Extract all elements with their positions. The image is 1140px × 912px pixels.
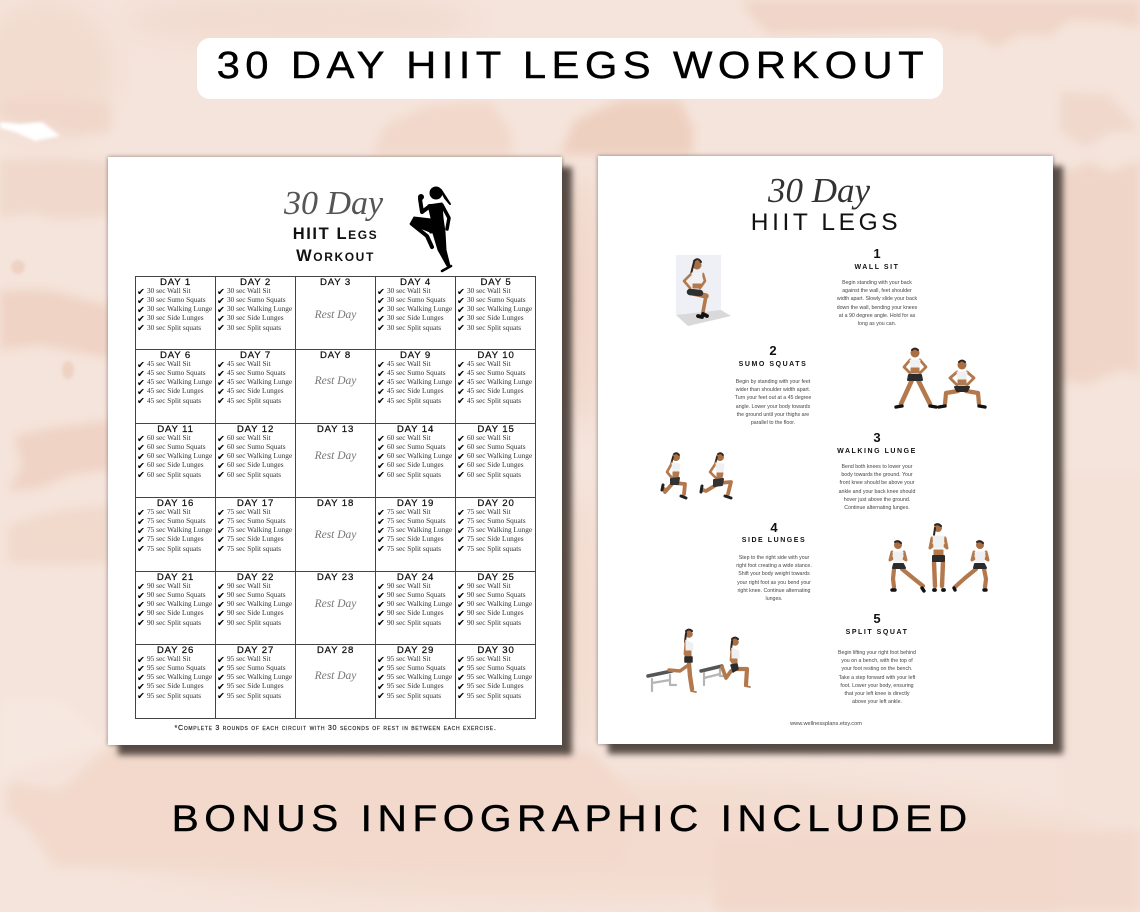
script heading: 30 Day: 30 Day bbox=[768, 171, 870, 210]
workout calendar table bbox=[135, 276, 536, 719]
day 22: 90 sec Sumo Squats bbox=[227, 590, 286, 599]
day 25: DAY 25 bbox=[477, 572, 515, 583]
day 29: 95 sec Sumo Squats bbox=[387, 663, 446, 672]
day 9: 45 sec Sumo Squats bbox=[387, 368, 446, 377]
exercise 5: split squat: 5 bbox=[873, 611, 881, 626]
day 26: 95 sec Walking Lunge bbox=[147, 672, 212, 681]
day 30: 95 sec Side Lunges bbox=[467, 681, 524, 690]
exercise 1: wall sit: at a 90 degree angle. Hold for as bbox=[839, 313, 915, 319]
exercise 2: sumo squats: 2 bbox=[769, 343, 777, 358]
day 14: 60 sec Side Lunges bbox=[387, 460, 444, 469]
exercise 4: side lunges bbox=[736, 520, 812, 602]
day 8: Rest Day bbox=[315, 375, 356, 387]
website footer: www.wellnessplans.etsy.com bbox=[790, 721, 862, 727]
exercise 3: walking lunge: body towards the ground. Your bbox=[841, 472, 913, 478]
day 6: 45 sec Sumo Squats bbox=[147, 368, 206, 377]
day 29: 95 sec Split squats bbox=[387, 691, 441, 700]
day 11: 60 sec Wall Sit bbox=[147, 433, 191, 442]
exercise 1: wall sit: Begin standing with your back bbox=[842, 280, 912, 286]
day 27: DAY 27 bbox=[237, 645, 274, 656]
day 1: 30 sec Walking Lunge bbox=[147, 304, 212, 313]
exercise 2: sumo squats: Turn your feet out at a 45 degree bbox=[735, 395, 811, 401]
day 21 bbox=[136, 572, 216, 645]
day 25: 90 sec Side Lunges bbox=[467, 608, 524, 617]
exercise 4: side lunges: SIDE LUNGES bbox=[742, 537, 806, 544]
day 16: 75 sec Sumo Squats bbox=[147, 516, 206, 525]
day 13: Rest Day bbox=[315, 450, 356, 462]
day 16: 75 sec Wall Sit bbox=[147, 507, 191, 516]
day 23 bbox=[296, 572, 376, 645]
day 11 bbox=[136, 424, 216, 498]
day 29: 95 sec Side Lunges bbox=[387, 681, 444, 690]
day 14: 60 sec Sumo Squats bbox=[387, 442, 446, 451]
day 3: DAY 3 bbox=[320, 277, 351, 288]
day 14: 60 sec Wall Sit bbox=[387, 433, 431, 442]
day 25: 90 sec Wall Sit bbox=[467, 581, 511, 590]
day 27: 95 sec Side Lunges bbox=[227, 681, 284, 690]
heading: HIIT Legs Workout: Workout bbox=[296, 247, 375, 265]
panel: 30 day calendar page bbox=[108, 157, 562, 745]
day 17: 75 sec Wall Sit bbox=[227, 507, 271, 516]
day 26: 95 sec Split squats bbox=[147, 691, 201, 700]
day 20: DAY 20 bbox=[477, 498, 515, 509]
day 22: 90 sec Side Lunges bbox=[227, 608, 284, 617]
day 7 bbox=[216, 350, 296, 424]
day 8 bbox=[296, 350, 376, 424]
day 10: 45 sec Side Lunges bbox=[467, 386, 524, 395]
heading: HIIT Legs Workout bbox=[293, 225, 378, 265]
day 15: 60 sec Split squats bbox=[467, 470, 521, 479]
heading: HIIT LEGS: HIIT LEGS bbox=[751, 209, 901, 236]
day 25: 90 sec Sumo Squats bbox=[467, 590, 526, 599]
day 19: 75 sec Wall Sit bbox=[387, 507, 431, 516]
day 15: DAY 15 bbox=[477, 424, 515, 435]
panel: HIIT legs exercise infographic page bbox=[598, 156, 1053, 744]
day 1: 30 sec Side Lunges bbox=[147, 313, 204, 322]
day 4: 30 sec Split squats bbox=[387, 323, 441, 332]
day 21: 90 sec Split squats bbox=[147, 618, 201, 627]
day 27: 95 sec Walking Lunge bbox=[227, 672, 292, 681]
day 4 bbox=[376, 277, 456, 350]
day 26: 95 sec Wall Sit bbox=[147, 654, 191, 663]
day 16: 75 sec Walking Lunge bbox=[147, 525, 212, 534]
white paper showing through bbox=[0, 122, 60, 141]
exercise 3: walking lunge: WALKING LUNGE bbox=[837, 448, 917, 455]
exercise 4: side lunges: Shift your body weight towards bbox=[738, 571, 810, 577]
day 21: 90 sec Wall Sit bbox=[147, 581, 191, 590]
exercise 5: split squat: SPLIT SQUAT bbox=[846, 629, 908, 636]
day 1: DAY 1 bbox=[160, 277, 191, 288]
day 3 bbox=[296, 277, 376, 350]
day 9: 45 sec Wall Sit bbox=[387, 359, 431, 368]
day 25: 90 sec Walking Lunge bbox=[467, 599, 532, 608]
exercise 2: sumo squats: parallel to the floor. bbox=[751, 420, 795, 426]
day 24: 90 sec Side Lunges bbox=[387, 608, 444, 617]
day 11: 60 sec Sumo Squats bbox=[147, 442, 206, 451]
day 25: 90 sec Split squats bbox=[467, 618, 521, 627]
day 11: 60 sec Split squats bbox=[147, 470, 201, 479]
day 14: 60 sec Walking Lunge bbox=[387, 451, 452, 460]
illustration: side lunges bbox=[890, 524, 988, 591]
day 4: 30 sec Wall Sit bbox=[387, 286, 431, 295]
day 1: 30 sec Split squats bbox=[147, 323, 201, 332]
day 14 bbox=[376, 424, 456, 498]
day 5: DAY 5 bbox=[480, 277, 512, 288]
day 19: 75 sec Side Lunges bbox=[387, 534, 444, 543]
illustration: wall sit bbox=[676, 255, 731, 326]
day 10: 45 sec Walking Lunge bbox=[467, 377, 532, 386]
day 9: 45 sec Walking Lunge bbox=[387, 377, 452, 386]
day 9: 45 sec Split squats bbox=[387, 396, 441, 405]
exercise 3: walking lunge: hover just above the ground. bbox=[844, 497, 910, 503]
day 15: 60 sec Wall Sit bbox=[467, 433, 511, 442]
exercise 4: side lunges: your right foot as you bend your bbox=[737, 580, 811, 586]
day 29: DAY 29 bbox=[397, 645, 434, 656]
day 6: DAY 6 bbox=[160, 350, 191, 361]
day 5 bbox=[456, 277, 536, 350]
exercise 1: wall sit: long as you can. bbox=[858, 321, 896, 327]
footnote: *Complete 3 rounds of each circuit with 30 seconds of rest in between each exercise. bbox=[174, 723, 497, 732]
day 11: DAY 11 bbox=[157, 424, 194, 435]
day 27: 95 sec Sumo Squats bbox=[227, 663, 286, 672]
day 21: 90 sec Side Lunges bbox=[147, 608, 204, 617]
day 1: 30 sec Wall Sit bbox=[147, 286, 191, 295]
exercise 3: walking lunge: 3 bbox=[873, 430, 881, 445]
day 24: 90 sec Sumo Squats bbox=[387, 590, 446, 599]
day 10 bbox=[456, 350, 536, 424]
day 22 bbox=[216, 572, 296, 645]
day 30: 95 sec Split squats bbox=[467, 691, 521, 700]
exercise 3: walking lunge: front knee should be above your bbox=[839, 480, 914, 486]
day 20: 75 sec Side Lunges bbox=[467, 534, 524, 543]
day 30: 95 sec Wall Sit bbox=[467, 654, 511, 663]
day 18: Rest Day bbox=[315, 529, 356, 541]
illustration: walking lunge bbox=[662, 453, 731, 498]
day 10: 45 sec Sumo Squats bbox=[467, 368, 526, 377]
day 7: 45 sec Walking Lunge bbox=[227, 377, 292, 386]
exercise 5: split squat: Begin lifting your right foot behind bbox=[838, 650, 916, 656]
day 17: 75 sec Side Lunges bbox=[227, 534, 284, 543]
day 20: 75 sec Split squats bbox=[467, 544, 521, 553]
day 23: DAY 23 bbox=[317, 572, 354, 583]
day 22: 90 sec Wall Sit bbox=[227, 581, 271, 590]
day 11: 60 sec Walking Lunge bbox=[147, 451, 212, 460]
day 2 bbox=[216, 277, 296, 350]
illustration: sumo squats bbox=[896, 348, 985, 407]
day 7: 45 sec Side Lunges bbox=[227, 386, 284, 395]
day 10: 45 sec Wall Sit bbox=[467, 359, 511, 368]
exercise 1: wall sit bbox=[836, 246, 918, 327]
day 9 bbox=[376, 350, 456, 424]
day 5: 30 sec Side Lunges bbox=[467, 313, 524, 322]
day 6: 45 sec Split squats bbox=[147, 396, 201, 405]
day 19: 75 sec Sumo Squats bbox=[387, 516, 446, 525]
day 19: DAY 19 bbox=[397, 498, 434, 509]
day 12: 60 sec Sumo Squats bbox=[227, 442, 286, 451]
day 12: 60 sec Wall Sit bbox=[227, 433, 271, 442]
exercise 5: split squat: foot. Lower your body, ensuring bbox=[840, 683, 914, 689]
day 17: 75 sec Walking Lunge bbox=[227, 525, 292, 534]
day 5: 30 sec Split squats bbox=[467, 323, 521, 332]
day 29: 95 sec Walking Lunge bbox=[387, 672, 452, 681]
day 1 bbox=[136, 277, 216, 350]
day 18 bbox=[296, 498, 376, 572]
day 17 bbox=[216, 498, 296, 572]
day 12: DAY 12 bbox=[237, 424, 274, 435]
exercise 5: split squat: you on a bench, with the top of bbox=[841, 658, 913, 664]
day 5: 30 sec Walking Lunge bbox=[467, 304, 532, 313]
exercise 3: walking lunge: Continue alternating lunges. bbox=[844, 505, 910, 511]
day 28: DAY 28 bbox=[317, 645, 354, 656]
day 17: DAY 17 bbox=[237, 498, 274, 509]
day 6: 45 sec Wall Sit bbox=[147, 359, 191, 368]
exercise 4: side lunges: right foot creating a wide stance. bbox=[736, 563, 812, 569]
day 9: DAY 9 bbox=[400, 350, 431, 361]
day 22: 90 sec Split squats bbox=[227, 618, 281, 627]
day 30: 95 sec Sumo Squats bbox=[467, 663, 526, 672]
day 20: 75 sec Sumo Squats bbox=[467, 516, 526, 525]
day 28: Rest Day bbox=[315, 670, 356, 682]
day 12: 60 sec Walking Lunge bbox=[227, 451, 292, 460]
day 17: 75 sec Split squats bbox=[227, 544, 281, 553]
day 2: DAY 2 bbox=[240, 277, 271, 288]
day 3: Rest Day bbox=[315, 309, 356, 321]
day 30: 95 sec Walking Lunge bbox=[467, 672, 532, 681]
day 9: 45 sec Side Lunges bbox=[387, 386, 444, 395]
day 29 bbox=[376, 645, 456, 718]
day 16: DAY 16 bbox=[157, 498, 194, 509]
exercise illustrations bbox=[646, 255, 990, 693]
day 2: 30 sec Split squats bbox=[227, 323, 281, 332]
day 8: DAY 8 bbox=[320, 350, 351, 361]
exercise 4: side lunges: lunges. bbox=[766, 596, 782, 602]
exercise 2: sumo squats: Begin by standing with your feet bbox=[736, 379, 810, 385]
day 22: 90 sec Walking Lunge bbox=[227, 599, 292, 608]
day 7: 45 sec Wall Sit bbox=[227, 359, 271, 368]
day 27: 95 sec Wall Sit bbox=[227, 654, 271, 663]
day 17: 75 sec Sumo Squats bbox=[227, 516, 286, 525]
day 20: 75 sec Wall Sit bbox=[467, 507, 511, 516]
day 4: DAY 4 bbox=[400, 277, 431, 288]
day 6 bbox=[136, 350, 216, 424]
exercise 1: wall sit: WALL SIT bbox=[855, 264, 899, 271]
day 2: 30 sec Side Lunges bbox=[227, 313, 284, 322]
exercise 4: side lunges: 4 bbox=[770, 520, 778, 535]
day 15: 60 sec Sumo Squats bbox=[467, 442, 526, 451]
day 29: 95 sec Wall Sit bbox=[387, 654, 431, 663]
exercise 4: side lunges: Step to the right side with your bbox=[739, 555, 809, 561]
day 2: 30 sec Sumo Squats bbox=[227, 295, 286, 304]
day 26 bbox=[136, 645, 216, 718]
day 12: 60 sec Split squats bbox=[227, 470, 281, 479]
day 23: Rest Day bbox=[315, 598, 356, 610]
day 21: 90 sec Sumo Squats bbox=[147, 590, 206, 599]
exercise 5: split squat: your foot resting on the bench. bbox=[842, 666, 912, 672]
day 2: 30 sec Walking Lunge bbox=[227, 304, 292, 313]
exercise 2: sumo squats: the ground until your thighs are bbox=[737, 412, 809, 418]
day 26: 95 sec Side Lunges bbox=[147, 681, 204, 690]
day 14: DAY 14 bbox=[397, 424, 434, 435]
day 21: 90 sec Walking Lunge bbox=[147, 599, 212, 608]
day 15: 60 sec Walking Lunge bbox=[467, 451, 532, 460]
bottom caption: BONUS INFOGRAPHIC INCLUDED bbox=[171, 798, 973, 839]
exercise 4: side lunges: right knee. Continue alternating bbox=[738, 588, 810, 594]
day 7: DAY 7 bbox=[240, 350, 271, 361]
exercise 5: split squat: Take a step forward with your left bbox=[839, 675, 915, 681]
exercise 5: split squat bbox=[838, 611, 916, 705]
day 4: 30 sec Sumo Squats bbox=[387, 295, 446, 304]
day 11: 60 sec Side Lunges bbox=[147, 460, 204, 469]
day 19: 75 sec Split squats bbox=[387, 544, 441, 553]
day 24 bbox=[376, 572, 456, 645]
day 10: 45 sec Split squats bbox=[467, 396, 521, 405]
day 5: 30 sec Wall Sit bbox=[467, 286, 511, 295]
title banner bbox=[197, 38, 943, 99]
day 27 bbox=[216, 645, 296, 718]
day 6: 45 sec Side Lunges bbox=[147, 386, 204, 395]
day 19: 75 sec Walking Lunge bbox=[387, 525, 452, 534]
day 19 bbox=[376, 498, 456, 572]
day 24: 90 sec Split squats bbox=[387, 618, 441, 627]
exercise 1: wall sit: down the wall, bending your knees bbox=[837, 305, 917, 311]
exercise 5: split squat: that your left knee is directly bbox=[844, 691, 910, 697]
exercise 2: sumo squats: SUMO SQUATS bbox=[739, 361, 807, 368]
day 24: 90 sec Walking Lunge bbox=[387, 599, 452, 608]
day 25 bbox=[456, 572, 536, 645]
day 16: 75 sec Side Lunges bbox=[147, 534, 204, 543]
day 13 bbox=[296, 424, 376, 498]
day 16 bbox=[136, 498, 216, 572]
day 7: 45 sec Sumo Squats bbox=[227, 368, 286, 377]
day 16: 75 sec Split squats bbox=[147, 544, 201, 553]
day 18: DAY 18 bbox=[317, 498, 354, 509]
day 30: DAY 30 bbox=[477, 645, 515, 656]
exercise 1: wall sit: against the wall, feet shoulder bbox=[842, 288, 912, 294]
day 30 bbox=[458, 645, 532, 700]
day 14: 60 sec Split squats bbox=[387, 470, 441, 479]
day 12 bbox=[216, 424, 296, 498]
icon: running woman silhouette bbox=[410, 186, 452, 272]
exercise 1: wall sit: 1 bbox=[873, 246, 881, 261]
day 22: DAY 22 bbox=[237, 572, 274, 583]
exercise 3: walking lunge bbox=[837, 430, 917, 511]
day 24: DAY 24 bbox=[397, 572, 434, 583]
exercise 2: sumo squats bbox=[734, 343, 812, 426]
day 27: 95 sec Split squats bbox=[227, 691, 281, 700]
day 4: 30 sec Walking Lunge bbox=[387, 304, 452, 313]
day 26: DAY 26 bbox=[157, 645, 194, 656]
exercise 3: walking lunge: Bend both knees to lower your bbox=[842, 464, 912, 470]
script heading: 30 Day: 30 Day bbox=[284, 185, 383, 222]
day 15: 60 sec Side Lunges bbox=[467, 460, 524, 469]
exercise 5: split squat: above your left ankle. bbox=[852, 699, 902, 705]
day 10: DAY 10 bbox=[477, 350, 515, 361]
day 12: 60 sec Side Lunges bbox=[227, 460, 284, 469]
day 24: 90 sec Wall Sit bbox=[387, 581, 431, 590]
day 26: 95 sec Sumo Squats bbox=[147, 663, 206, 672]
exercise 2: sumo squats: wider than shoulder width apart. bbox=[736, 387, 810, 393]
illustration: split squat with bench bbox=[648, 630, 750, 692]
day 21: DAY 21 bbox=[157, 572, 194, 583]
day 5: 30 sec Sumo Squats bbox=[467, 295, 526, 304]
exercise 1: wall sit: width apart. Slowly slide your back bbox=[837, 296, 917, 302]
exercise 3: walking lunge: ankle and your back knee should bbox=[839, 489, 915, 495]
exercise 2: sumo squats: angle. Lower your body towards bbox=[736, 404, 810, 410]
day 6: 45 sec Walking Lunge bbox=[147, 377, 212, 386]
day 28 bbox=[296, 645, 376, 718]
day 4: 30 sec Side Lunges bbox=[387, 313, 444, 322]
day 2: 30 sec Wall Sit bbox=[227, 286, 271, 295]
day 20 bbox=[456, 498, 536, 572]
day 1: 30 sec Sumo Squats bbox=[147, 295, 206, 304]
day 13: DAY 13 bbox=[317, 424, 354, 435]
title banner: 30 DAY HIIT LEGS WORKOUT bbox=[217, 45, 929, 87]
day 15 bbox=[456, 424, 536, 498]
day 7: 45 sec Split squats bbox=[227, 396, 281, 405]
day 20: 75 sec Walking Lunge bbox=[467, 525, 532, 534]
heading: HIIT Legs Workout: HIIT Legs bbox=[293, 225, 378, 243]
